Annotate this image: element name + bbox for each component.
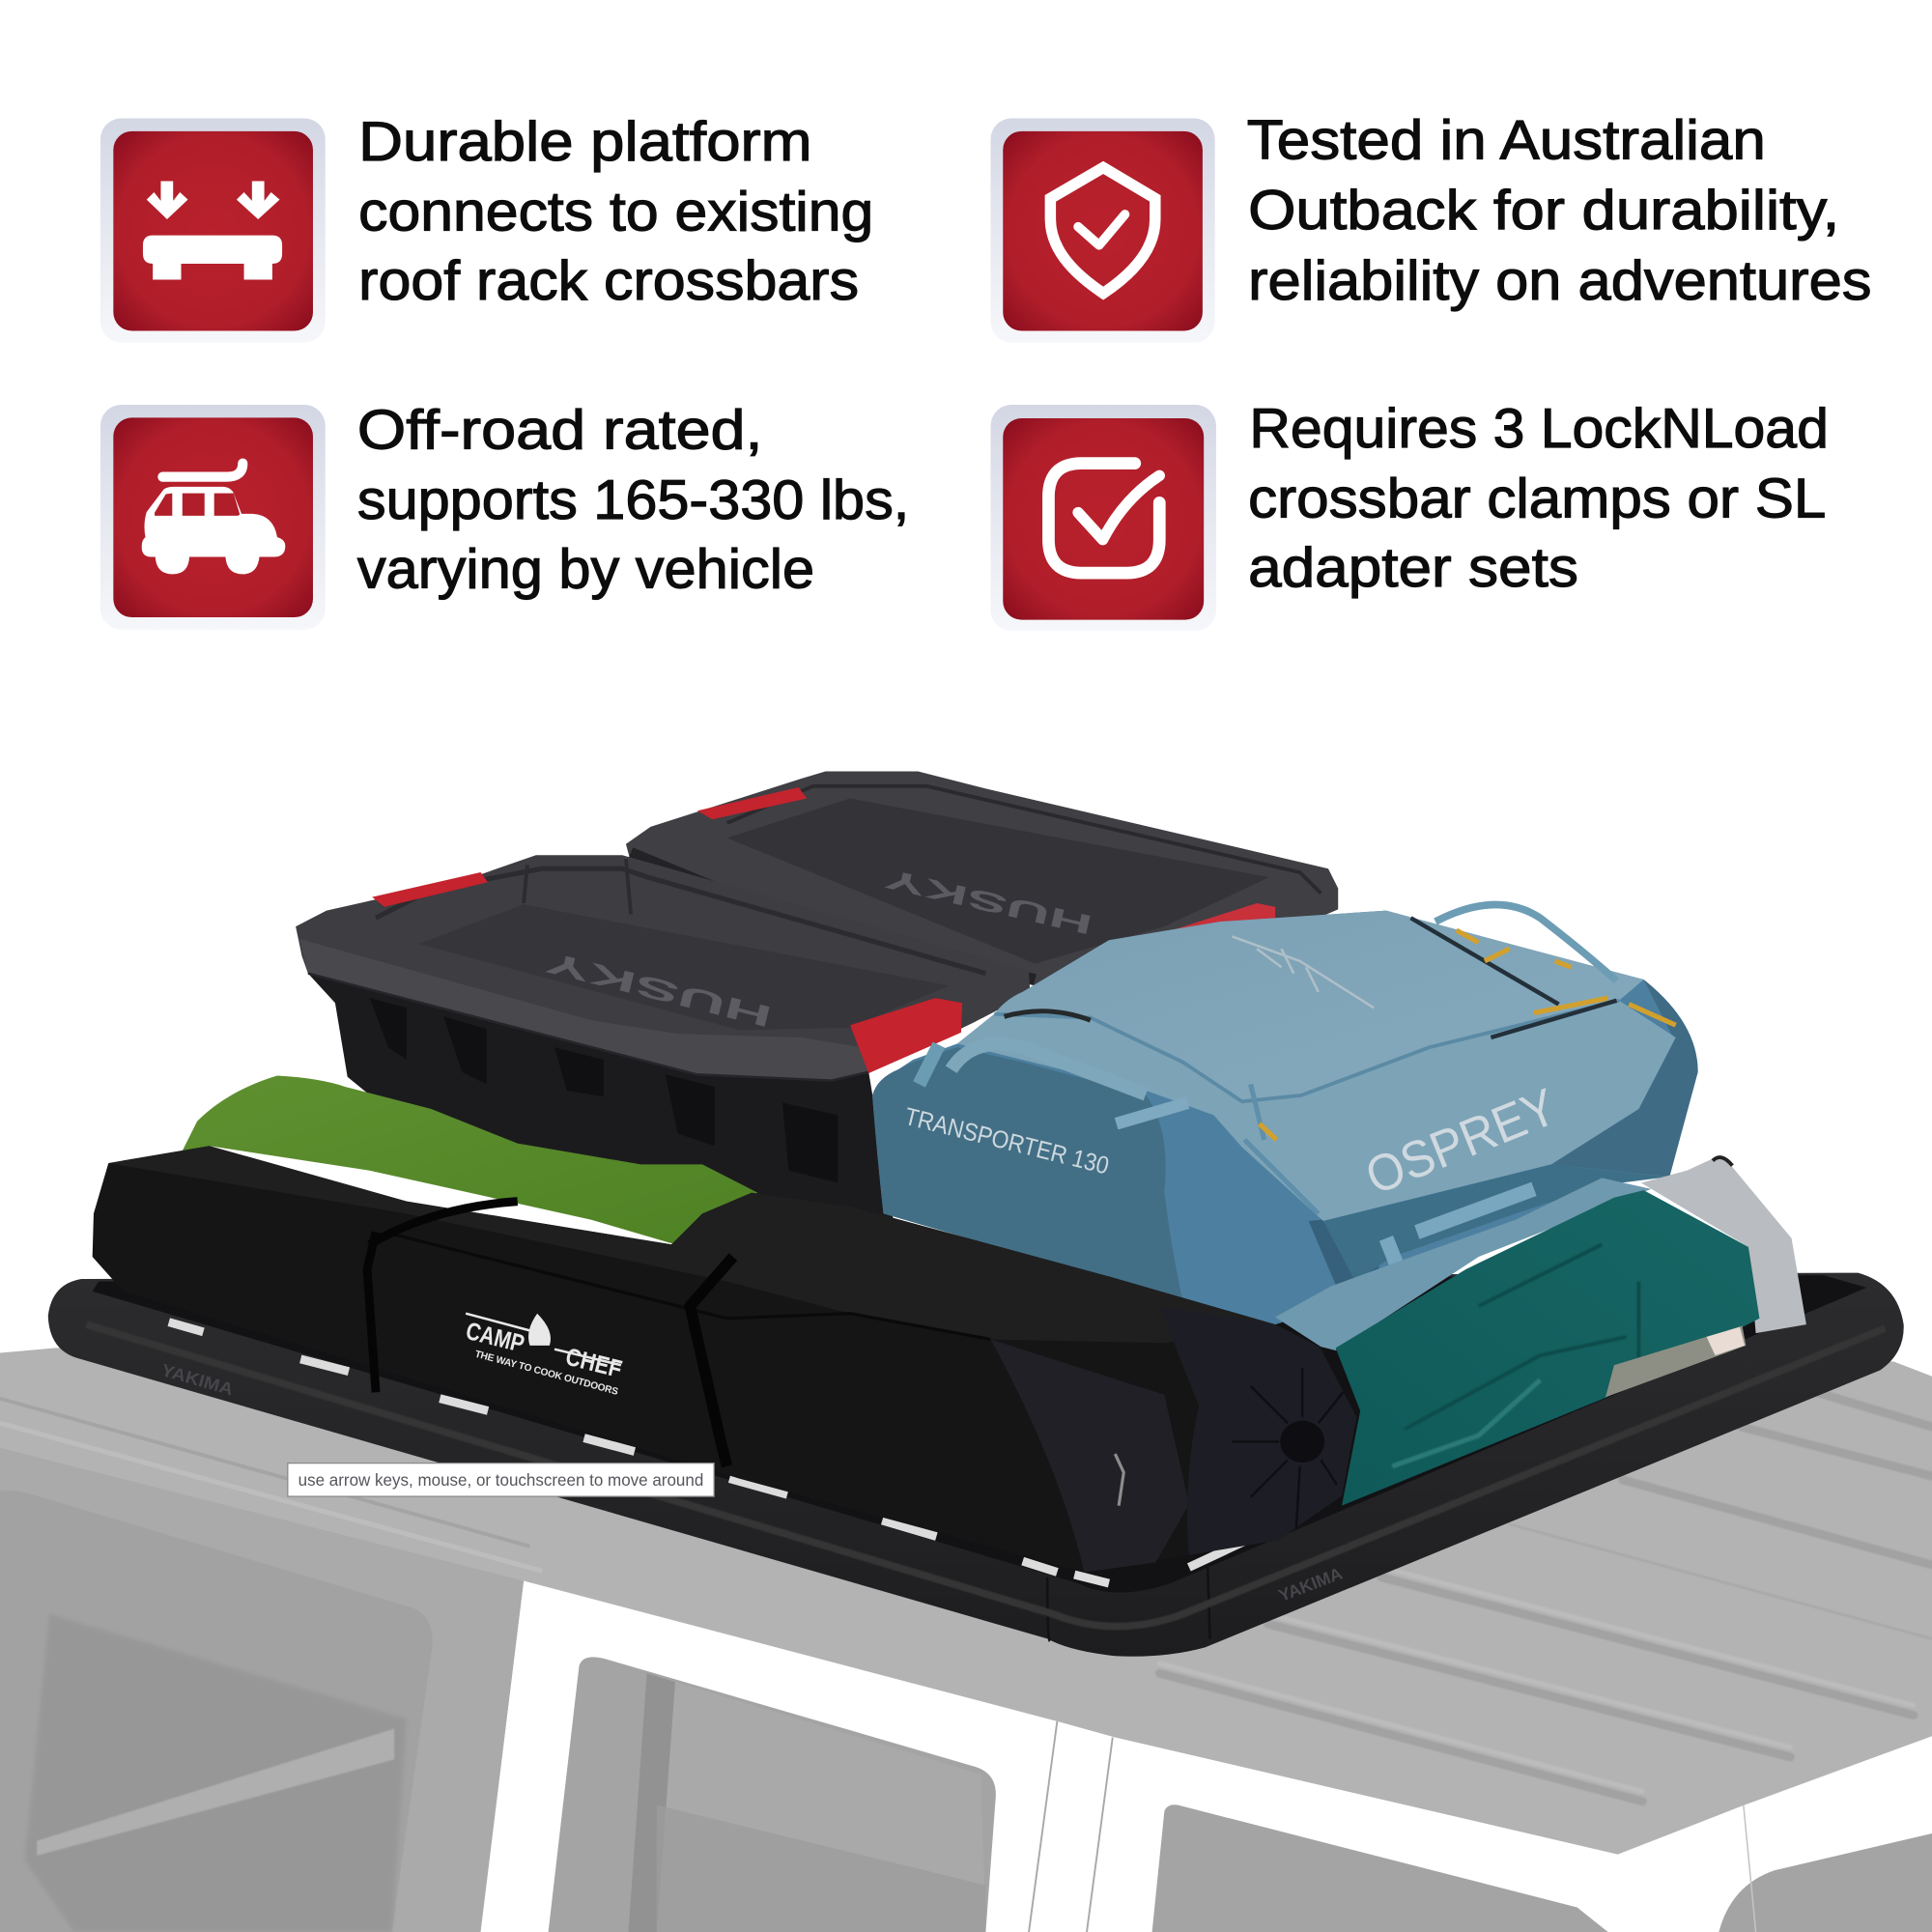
text: off-road rated: supports 165-330 lbs,: [357, 469, 909, 531]
light blue duffel strip: [1275, 1178, 1651, 1350]
rear quarter window: [1719, 1833, 1932, 1932]
duffel top flap: [994, 911, 1644, 1101]
blue duffel bag: [872, 904, 1698, 1324]
antenna: [1744, 1805, 1756, 1932]
green rolled bag: [179, 1076, 757, 1244]
camp chef logo: CHEF: [563, 1344, 624, 1383]
door seams: [1029, 1721, 1113, 1932]
duffel brand: OSPREY: [1358, 1078, 1565, 1206]
rear tote brand: HUSKY: [882, 864, 1095, 940]
text: off-road rated: varying by vehicle: [357, 538, 814, 600]
feature 4: requires clamps: [991, 398, 1844, 631]
background vehicle: white hardtop in grey: [0, 1348, 1932, 1932]
text: durable platform: roof rack crossbars: [358, 250, 859, 312]
controls tooltip: use arrow keys, mouse, or touchscreen to move around: [298, 1470, 703, 1490]
duffel model name: TRANSPORTER 130: [901, 1103, 1112, 1180]
bag straps: [367, 1202, 518, 1392]
front storage tote: [296, 855, 1030, 1220]
controls tooltip: [288, 1463, 714, 1496]
icon: car with roof rack: [100, 405, 326, 630]
camp chef logo: THE WAY TO COOK OUTDOORS: [473, 1350, 619, 1398]
rear storage tote: [626, 771, 1338, 985]
text: tested in australian outback: Outback for durability,: [1248, 180, 1839, 242]
text: requires clamps: crossbar clamps or SL: [1248, 469, 1826, 530]
teal tent bag: [1336, 1190, 1759, 1506]
text: requires clamps: adapter sets: [1248, 537, 1578, 599]
feature 3: tested in australian outback: [991, 110, 1872, 343]
rear tote red latches: [697, 787, 807, 819]
rear door window: [1152, 1804, 1608, 1932]
duffel end panel: [1551, 980, 1698, 1177]
duffel dark pocket: [1309, 1213, 1378, 1288]
rack deck slats: [169, 1322, 1247, 1583]
feature 1: durable platform: [100, 111, 889, 343]
bag side panel: [991, 1339, 1189, 1573]
text: tested in australian outback: Tested in Australian: [1247, 110, 1766, 172]
duffel lower band: [1323, 1164, 1665, 1282]
text: requires clamps: Requires 3 LockNLoad: [1249, 398, 1829, 460]
duffel mesh end panel: [872, 1047, 1182, 1301]
text: off-road rated: Off-road rated,: [357, 399, 763, 461]
icon: platform with down arrows: [100, 118, 326, 343]
feature 2: off-road rated: [100, 399, 924, 630]
front tote brand: HUSKY: [543, 946, 776, 1034]
camp chef logo: CAMP: [463, 1318, 527, 1358]
duffel tree logo: [1233, 936, 1374, 1008]
black camp chef bag: [93, 1146, 1356, 1573]
text: durable platform: connects to existing: [358, 182, 873, 243]
roof rack platform: YAKIMA: [1276, 1564, 1345, 1605]
front tote recess: [419, 904, 949, 1030]
bag zipper: [1115, 1454, 1123, 1506]
duffel zips: [1410, 918, 1616, 1037]
drawstring end of bag: [1159, 1306, 1356, 1555]
text: tested in australian outback: reliability on adventures: [1248, 250, 1871, 312]
rack logos: YAKIMA: [159, 1360, 236, 1399]
grey mesh bag: [1641, 1155, 1806, 1333]
front tote red latches: [372, 872, 488, 907]
camp chef logo: [463, 1314, 624, 1398]
roof rack platform: [48, 1273, 1904, 1657]
front door window: [549, 1657, 996, 1932]
duffel straps and handles: [952, 1044, 1146, 1094]
text: durable platform: Durable platform: [358, 111, 812, 173]
front tote rim wall: [299, 939, 870, 1081]
tent label: [1605, 1325, 1746, 1397]
left rear side window: [0, 1491, 433, 1932]
duffel front panel: [957, 1001, 1676, 1221]
icon: shield with check: [991, 118, 1215, 343]
icon: checked box: [991, 405, 1216, 631]
